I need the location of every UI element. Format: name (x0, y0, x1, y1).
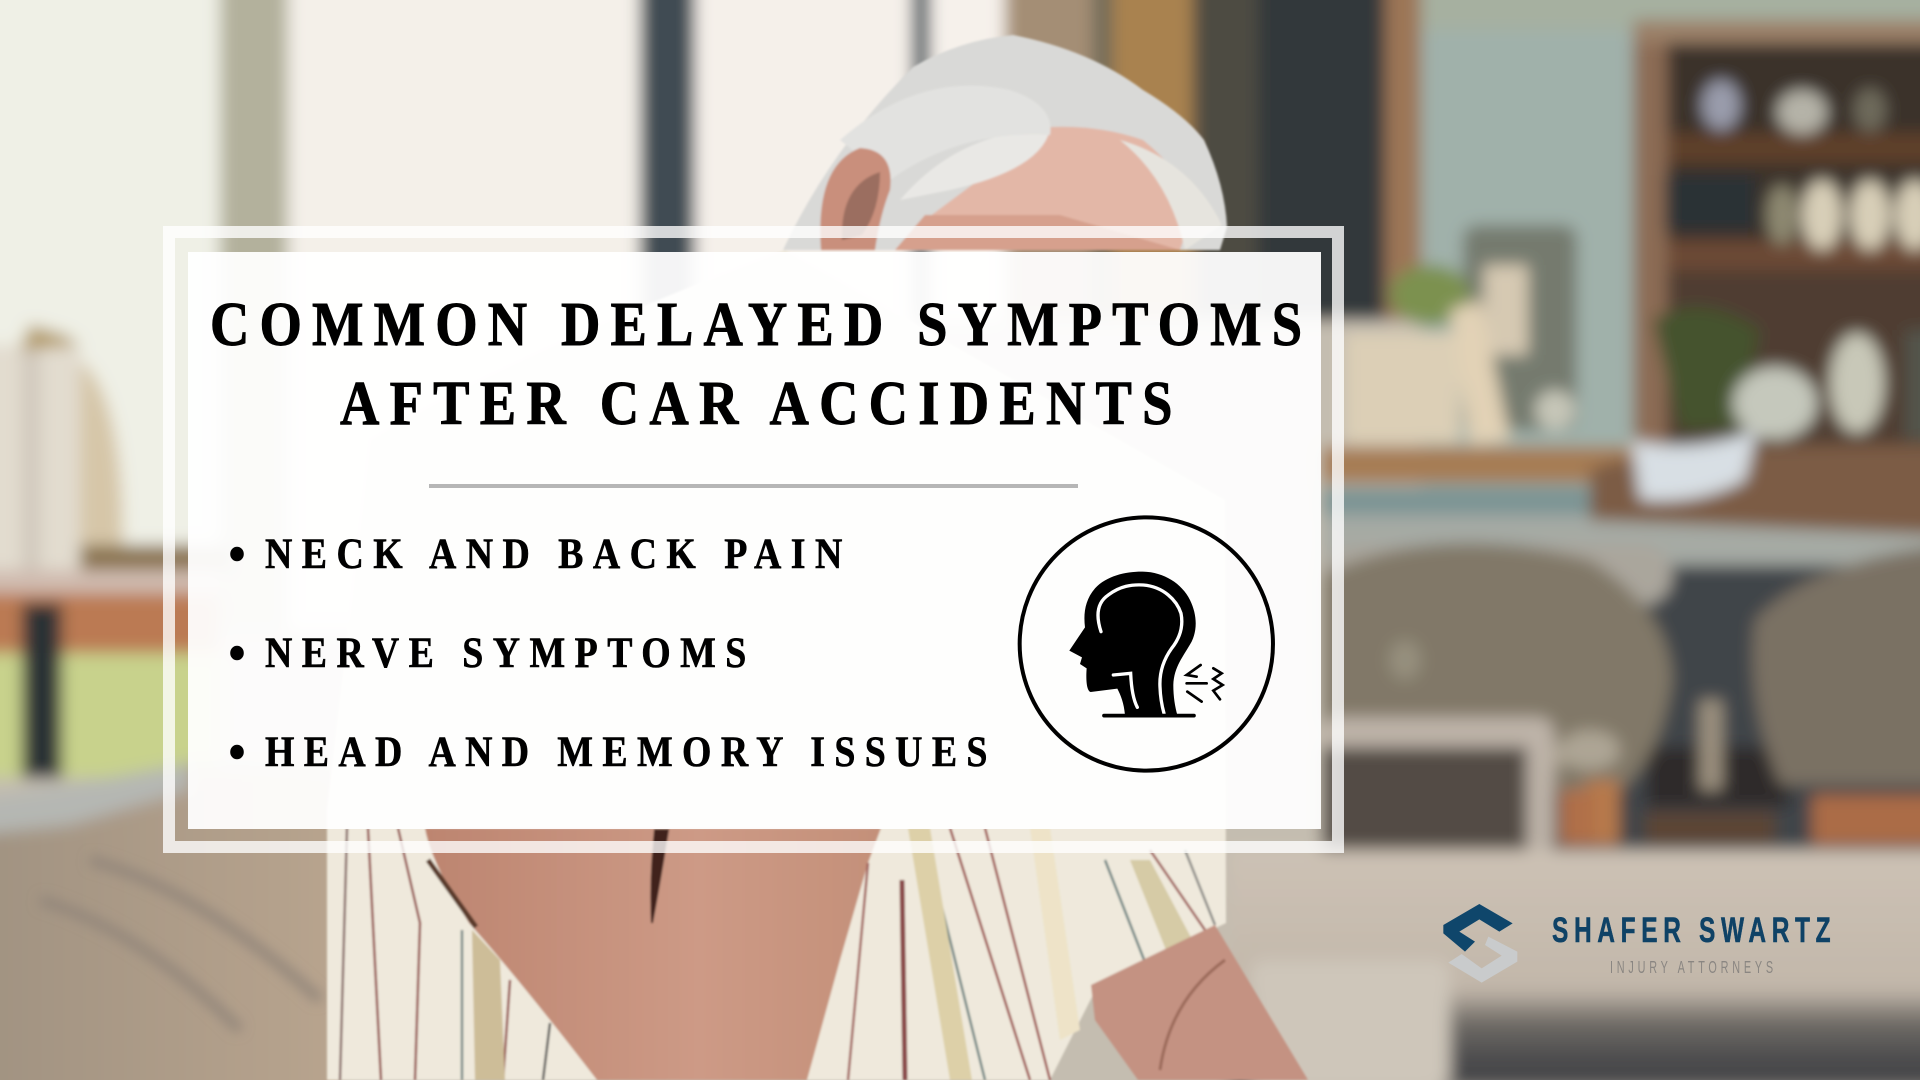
item: nerve symptoms: NERVE SYMPTOMS (265, 629, 746, 677)
ear (820, 148, 891, 250)
hair strands (900, 130, 1050, 200)
divider (429, 484, 1078, 488)
logo: Shafer Swartz Injury Attorneys (1443, 904, 1831, 983)
icon: head with neck pain (1020, 517, 1273, 771)
stripes (340, 828, 1215, 1080)
logo mark (1443, 904, 1517, 983)
item: neck and back pain: NECK AND BACK PAIN (265, 530, 842, 578)
forehead (895, 127, 1195, 250)
hair (783, 35, 1227, 250)
symptoms list (230, 530, 987, 776)
arm (425, 828, 881, 1080)
wordmark: SHAFER SWARTZ (1552, 912, 1831, 950)
outer translucent frame (169, 232, 1338, 847)
title: COMMON DELAYED SYMPTOMS (210, 290, 1302, 359)
elbow creases (651, 830, 668, 923)
torso (327, 250, 1226, 1080)
title (210, 290, 1302, 438)
item: head and memory issues: HEAD AND MEMORY ISSUES (265, 728, 987, 776)
title: AFTER CAR ACCIDENTS (340, 369, 1172, 438)
white content panel (188, 252, 1321, 829)
tagline: INJURY ATTORNEYS (1610, 959, 1773, 978)
right arm (1091, 925, 1308, 1080)
